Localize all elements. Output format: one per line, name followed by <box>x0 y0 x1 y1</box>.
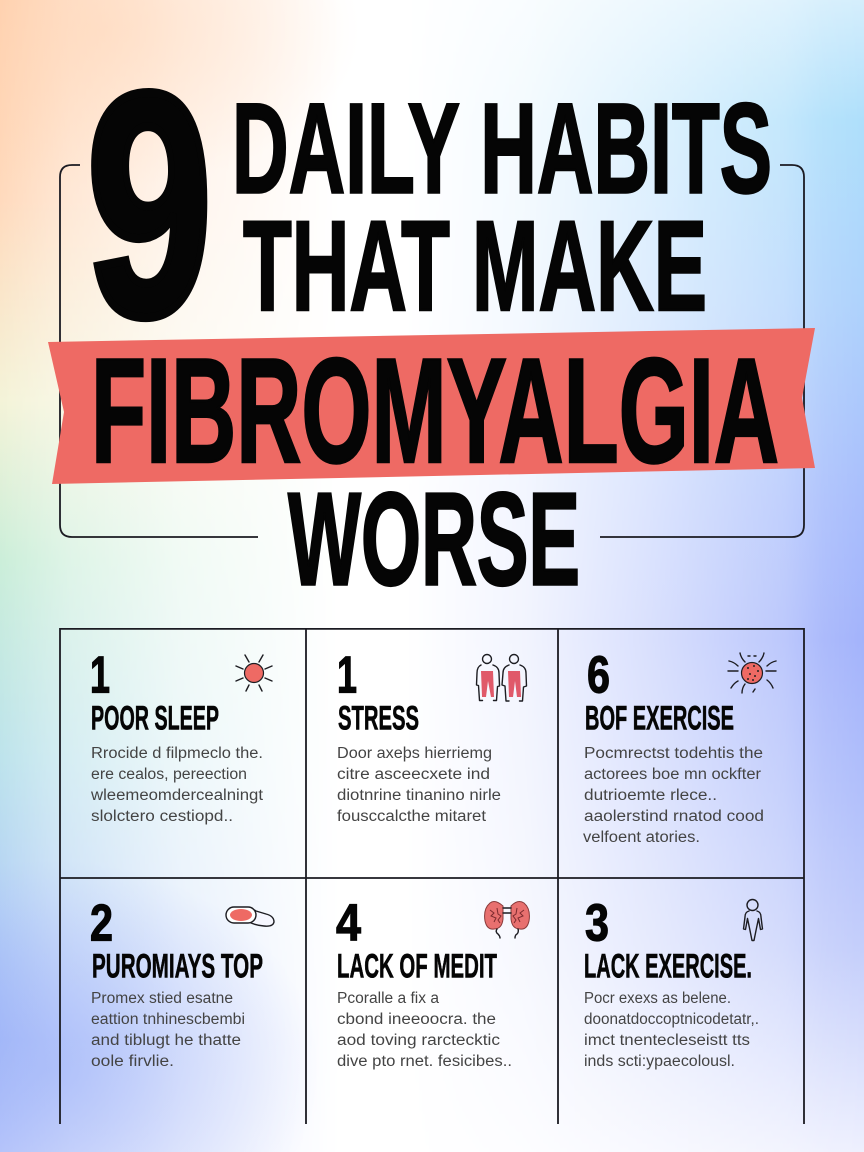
icon: lungs <box>485 902 529 938</box>
heading: BOF EXERCISE <box>585 700 734 738</box>
heading: STRESS <box>338 700 419 738</box>
description: slolctero cestiopd.. <box>91 808 233 825</box>
description: Pocr exexs as belene. <box>584 990 731 1007</box>
description: aaolerstind rnatod cood <box>584 808 764 825</box>
panel: lack of medit <box>336 894 529 1070</box>
description: ere cealos, pereection <box>91 766 247 783</box>
panel: bof exercise <box>583 646 776 846</box>
description: citre asceecxete ind <box>337 766 490 783</box>
habit grid lines <box>60 628 804 1124</box>
description: eattion tnhinescbembi <box>91 1011 245 1028</box>
description: fousccalcthe mitaret <box>337 808 487 825</box>
description <box>91 990 245 1070</box>
icon: sun <box>236 655 272 691</box>
heading: POOR SLEEP <box>91 700 219 738</box>
description: inds scti:ypaecolousl. <box>584 1053 735 1070</box>
number 4: 4 <box>336 894 361 952</box>
heading: PUROMIAYS TOP <box>92 948 263 986</box>
panel: stress <box>337 646 526 825</box>
number 3: 3 <box>585 894 609 952</box>
description: doonatdoccoptnicodetatr,. <box>584 1011 759 1028</box>
description: imct tnentecleseistt tts <box>584 1032 750 1049</box>
description: Door axeþs hierriemg <box>337 745 492 762</box>
icon: standing person <box>744 900 762 940</box>
description <box>584 990 759 1070</box>
panel: poor sleep <box>90 646 272 825</box>
description: and tiblugt he thatte <box>91 1032 241 1049</box>
description: dutrioemte rlece.. <box>584 787 717 804</box>
description: Pocmrectst todehtis the <box>584 745 763 762</box>
description: Pcoralle a fix a <box>337 990 439 1007</box>
description: Promex stied esatne <box>91 990 233 1007</box>
description <box>583 745 764 846</box>
description: oole firvlie. <box>91 1053 174 1070</box>
icon: pill <box>226 907 274 926</box>
number 2: 2 <box>90 894 113 952</box>
big number 9: 9 <box>86 28 212 382</box>
panel: lack exercise <box>584 894 762 1070</box>
description: dive pto rnet. fesicibes.. <box>337 1053 512 1070</box>
description: diotnrine tinanino nirle <box>337 787 501 804</box>
description <box>90 745 264 825</box>
description: velfoent atories. <box>583 829 700 846</box>
title line: worse: WORSE <box>288 466 580 612</box>
panel: puromiays top <box>90 894 274 1070</box>
heading: LACK EXERCISE. <box>584 948 752 986</box>
title frame <box>60 165 804 537</box>
description <box>337 745 501 825</box>
icon: two bodies <box>476 654 526 701</box>
number 1: 1 <box>90 646 110 704</box>
red ribbon <box>48 328 815 484</box>
description: wleemeomdercealningt <box>90 787 264 804</box>
description: aod toving rarctecktic <box>337 1032 500 1049</box>
icon: virus burst <box>728 653 776 693</box>
heading: LACK OF MEDIT <box>337 948 497 986</box>
description: cbond ineeoocra. the <box>337 1011 496 1028</box>
description <box>337 990 512 1070</box>
number 1: 1 <box>337 646 357 704</box>
number 6: 6 <box>587 646 610 704</box>
description: actorees boe mn ockfter <box>584 766 761 783</box>
description: Rrocide d filpmeclo the. <box>91 745 263 762</box>
